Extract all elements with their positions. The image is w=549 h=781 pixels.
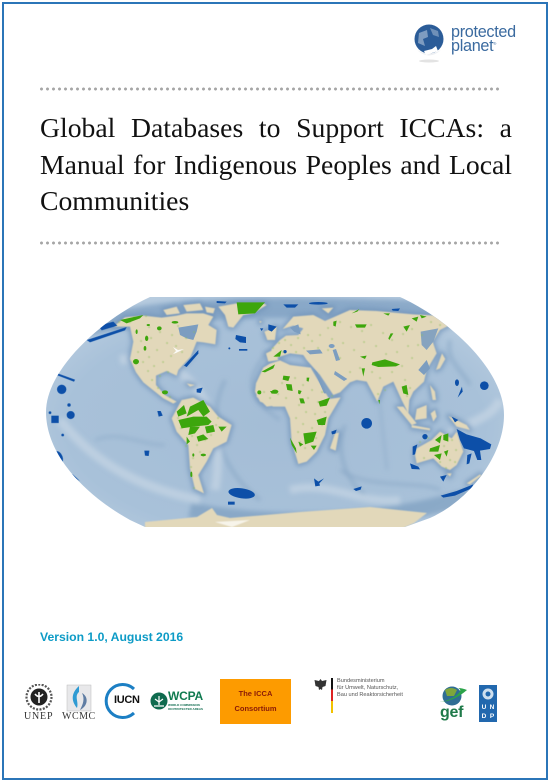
icon: WCMC flame (66, 684, 92, 712)
UNDP letters: P (490, 713, 494, 720)
logo: IUCN (104, 683, 140, 719)
icon: protected planet globe (414, 24, 444, 62)
protected marine areas, east (268, 302, 499, 498)
title: Indigenous (174, 149, 297, 180)
inland seas, east (290, 324, 438, 393)
title: Local (449, 149, 512, 180)
protected planet wordmark (451, 23, 516, 54)
logo: WCMC (62, 684, 96, 722)
icon: UNEP emblem (25, 684, 53, 711)
icon: WCPA tree (150, 692, 168, 710)
GEF wordmark: gef (440, 704, 463, 721)
title: Support (296, 112, 384, 143)
ministry name (337, 678, 403, 698)
ICCA Consortium line two: Consortium (234, 704, 277, 713)
title: for (133, 149, 165, 180)
logo: UNDP (479, 685, 497, 722)
UNDP letters (482, 704, 494, 720)
IUCN wordmark: IUCN (114, 694, 140, 706)
title: Peoples (306, 149, 392, 180)
icon: IUCN ring (104, 683, 135, 719)
UNDP letters: D (482, 713, 486, 720)
WCPA subtitle: WORLD COMMISSION (168, 703, 200, 707)
WCMC wordmark: WCMC (62, 711, 96, 722)
dotted divider bottom (40, 241, 500, 245)
ministry name: Bau und Reaktorsicherheit (337, 692, 403, 698)
dotted divider top (40, 87, 500, 91)
title: Communities (40, 185, 189, 216)
title: to (259, 112, 280, 143)
title: ICCAs: (399, 112, 484, 143)
terrestrial protected areas, east (270, 309, 448, 460)
logo: ICCA Consortium (220, 679, 291, 724)
world map (46, 297, 504, 527)
land masses (113, 303, 481, 528)
ministry name: für Umwelt, Naturschutz, (337, 685, 398, 691)
title: Databases (131, 112, 243, 143)
ICCA Consortium line one: The ICCA (239, 689, 272, 698)
ocean relief (70, 308, 480, 520)
UNDP letters: U (482, 704, 486, 711)
lighter protected area speckle (119, 316, 456, 488)
great lakes (173, 347, 184, 354)
WCPA subtitle (168, 703, 203, 711)
continental shelves (113, 303, 481, 493)
protected planet wordmark: protected (451, 23, 516, 41)
icon: GEF globe (440, 686, 467, 706)
logo: German ministry (314, 678, 403, 713)
logo row (24, 678, 497, 724)
icon: federal eagle (314, 679, 326, 690)
UNEP wordmark: UNEP (24, 711, 53, 722)
title: Global (40, 112, 115, 143)
title (40, 112, 512, 216)
version label: Version 1.0, August 2016 (40, 630, 183, 644)
UNDP letters: N (490, 704, 494, 711)
inland seas, west (178, 324, 198, 340)
title: Manual (40, 149, 125, 180)
title: and (400, 149, 440, 180)
flag bar (331, 678, 333, 713)
ministry name: Bundesministerium (337, 678, 385, 684)
protected marine areas, west (49, 301, 263, 505)
WCPA wordmark: WCPA (168, 689, 203, 703)
title: a (500, 112, 512, 143)
protected planet wordmark: planet® (451, 36, 496, 54)
ocean (40, 290, 510, 535)
terrestrial protected areas, west (120, 302, 278, 477)
logo: UNEP (24, 684, 53, 722)
logo: GEF (440, 686, 467, 721)
logo: WCPA (150, 689, 203, 711)
WCPA subtitle: ON PROTECTED AREAS (168, 707, 203, 711)
icon: UN emblem (482, 688, 494, 700)
logo: protected planet (414, 23, 516, 62)
